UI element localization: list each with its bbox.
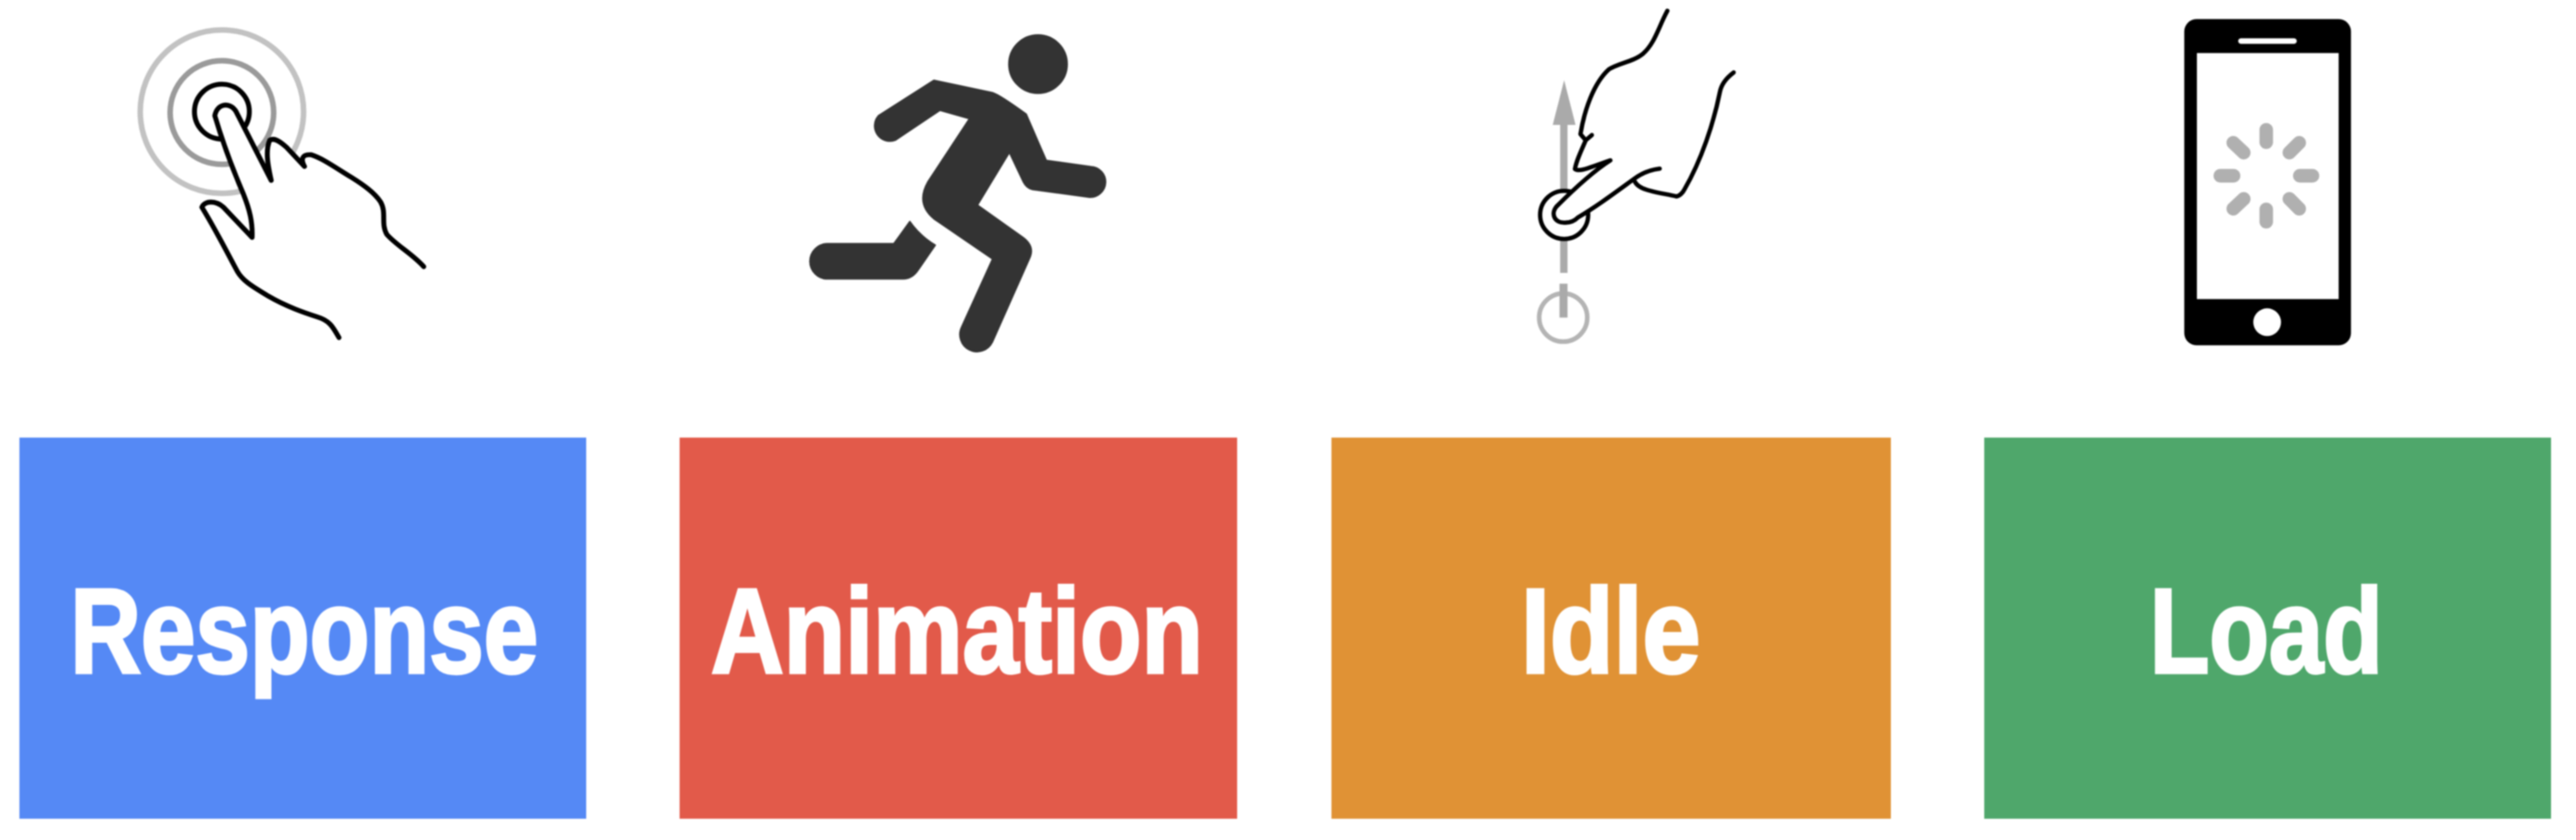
icon: phone with loading spinner: [2184, 19, 2351, 345]
icon: swiping hand with arrow: [1539, 11, 1734, 341]
icon: tapping hand with ripples: [141, 30, 432, 354]
label: Load: Load: [2150, 563, 2383, 698]
icon: running person: [810, 35, 1106, 352]
label: Idle: Idle: [1521, 563, 1700, 698]
label: Response: Response: [70, 563, 538, 698]
panel: Load: [1984, 438, 2551, 819]
panel: Idle: [1331, 438, 1891, 819]
panel: Response: [19, 438, 586, 819]
label: Animation: Animation: [711, 563, 1203, 698]
panel: Animation: [680, 438, 1237, 819]
